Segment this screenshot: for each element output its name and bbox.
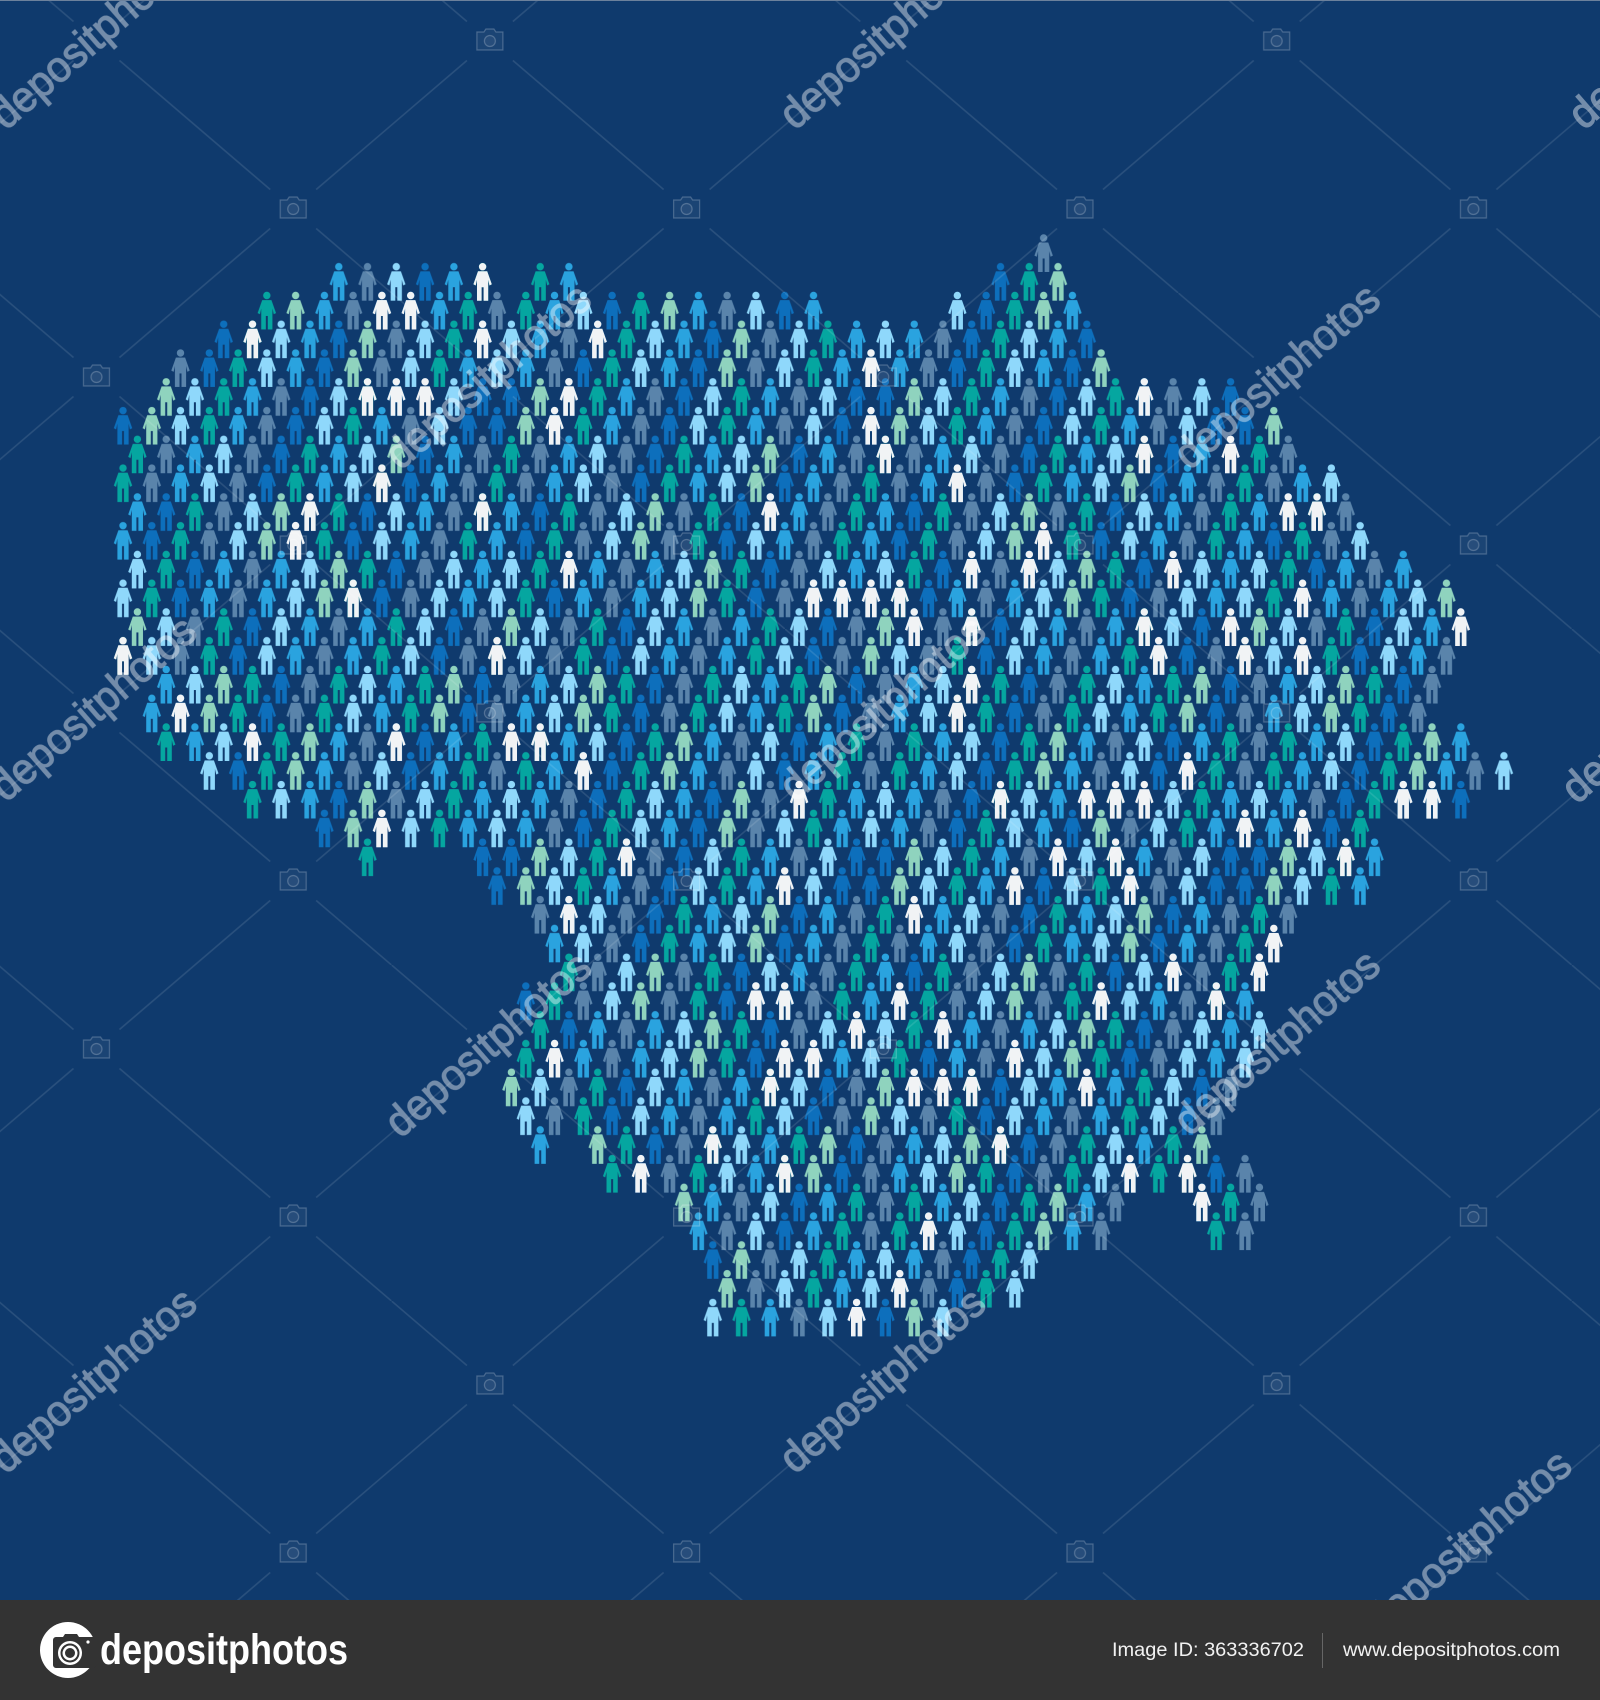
diagonal depositphotos watermarks: depositphotos [770,1278,995,1483]
diagonal depositphotos watermarks: depositphotos [376,274,600,479]
top edge line [0,0,1600,1]
icon: depositphotos camera logo [40,1622,96,1678]
diagonal depositphotos watermarks: depositphotos [1356,1440,1581,1645]
map of people figures [112,233,1515,1337]
diagonal depositphotos watermarks: depositphotos [1165,274,1389,479]
even rows of figures [126,262,1472,1337]
diagonal depositphotos watermarks: depositphotos [376,942,600,1147]
diagonal depositphotos watermarks: depositphotos [770,606,995,811]
logo wordmark: depositphotos [100,1626,348,1674]
image id: Image ID: 363336702 [1112,1639,1304,1661]
footer bar [0,1600,1600,1700]
website url: www.depositphotos.com [1342,1639,1560,1661]
diagonal depositphotos watermarks: depositphotos [1165,940,1389,1145]
white highlighted figures [114,263,1470,1336]
odd rows of figures [112,233,1515,1308]
